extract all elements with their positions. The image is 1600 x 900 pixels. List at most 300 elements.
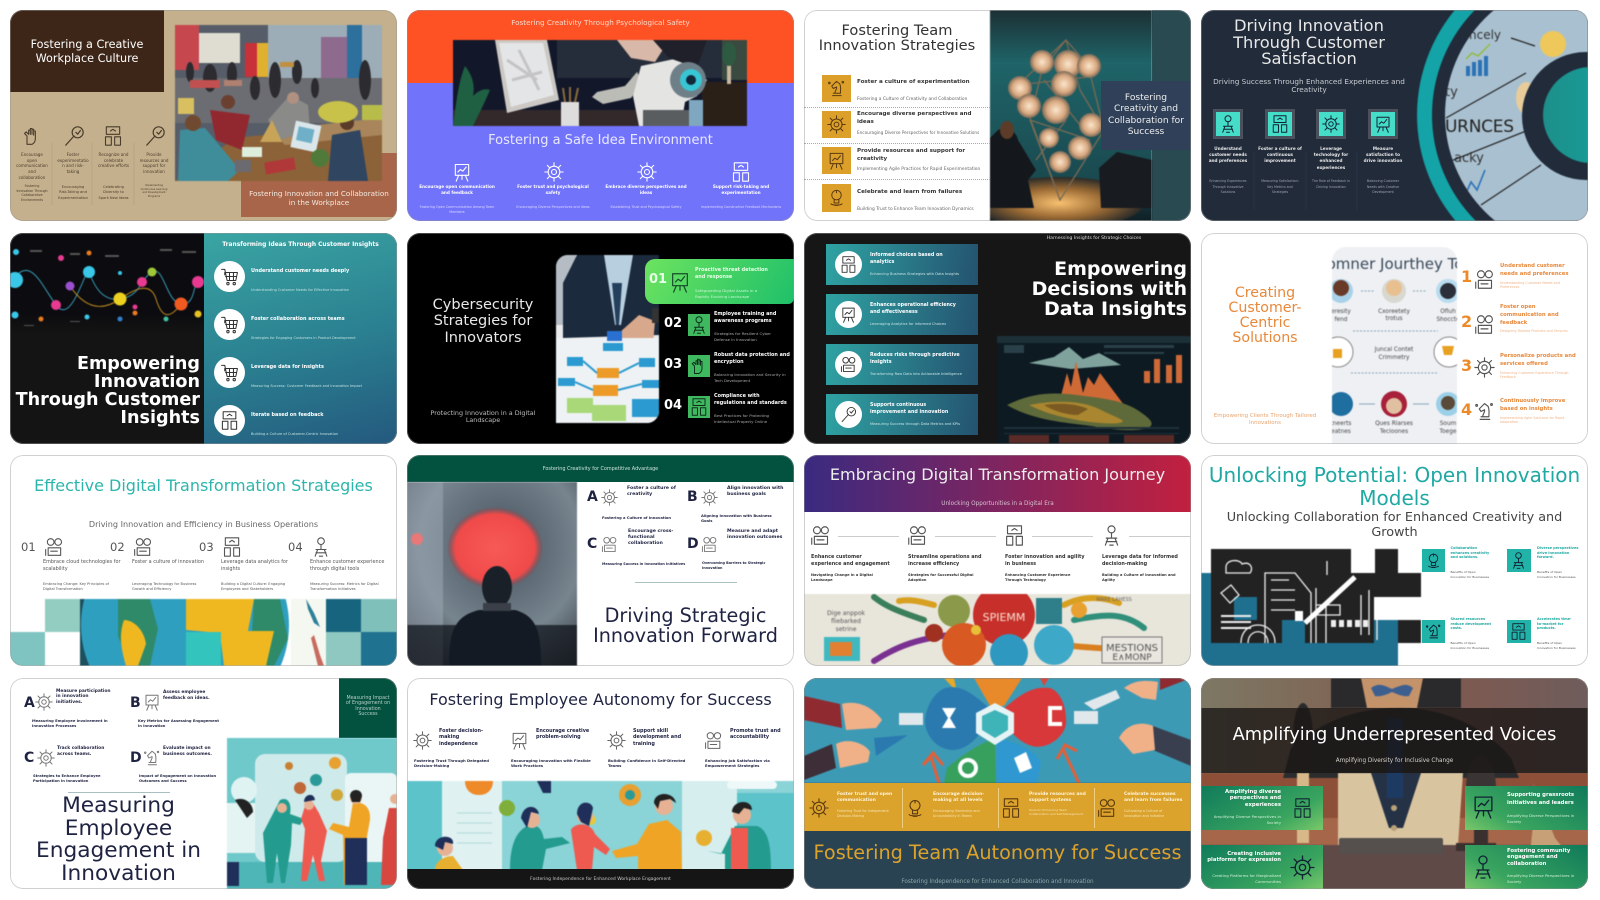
step: measure satisfaction (1364, 109, 1402, 194)
photo: strategy flowchart on table (555, 254, 660, 424)
subtitle: Driving Success Through Enhanced Experiences and (1213, 76, 1405, 86)
item: resources: Tools for Enhancing Team (1029, 808, 1067, 812)
illustration: hands around petals (804, 678, 1191, 782)
card: operational efficiency: Enhances operational efficiency (870, 302, 956, 308)
heading: Measuring (62, 793, 175, 818)
footer band: Fostering Independence for Enhanced Workplace Engagement (530, 876, 671, 882)
column: recognize efforts: Spark New Ideas (98, 196, 129, 200)
row: resources (804, 143, 990, 180)
heading (433, 296, 533, 346)
item B: Assess employee (163, 690, 205, 694)
item B: Aligning Innovation with Business (701, 514, 772, 518)
image: 3D data landscape (996, 336, 1191, 444)
column: foster experimentation: taking (67, 169, 79, 174)
side band (1152, 10, 1191, 221)
item: resources: Provide resources and (1029, 792, 1086, 796)
item C: Strategies to Enhance Employee (33, 774, 101, 778)
step 3 (1461, 353, 1576, 379)
item: risk taking: experimentation (721, 190, 761, 195)
step 04: Transformation Initiatives (310, 587, 356, 591)
photo: busy creative office (174, 24, 382, 182)
card: reduces risks: Transforming Raw Data into Actionable Intelligence (870, 372, 962, 376)
step 4: Adaptation (1500, 420, 1518, 424)
column: encourage communication: Collaborative (21, 193, 43, 197)
item: decision-making: Encouraging Ownership and (933, 808, 980, 812)
title box (10, 10, 164, 92)
step: informed decisions (1101, 525, 1191, 587)
item: open communication: and feedback (441, 190, 473, 195)
row: diverse perspectives: ideas (857, 119, 874, 125)
step: measure satisfaction: Balancing Customer (1367, 179, 1399, 183)
item 01 green highlight (645, 258, 794, 304)
item D (130, 746, 230, 788)
panel: Driving Innovation Through Customer Satisfaction (1201, 10, 1588, 221)
footer band (407, 868, 794, 888)
subtitle: Amplifying Diversity for Inclusive Change (1336, 758, 1453, 764)
insight: leverage data (214, 357, 362, 388)
step: customer experience: Navigating Change in a Digital (811, 573, 873, 577)
item B: Align innovation with (727, 486, 783, 491)
item B: in Innovation (138, 724, 165, 728)
item: diverse perspectives: Benefits of Open (1537, 570, 1562, 574)
step 01: Embrace cloud technologies for (43, 559, 120, 565)
item A: Fostering a Culture of Innovation (602, 516, 671, 520)
step 2 (1461, 304, 1568, 334)
item: skill development: training (633, 741, 655, 747)
heading: Cybersecurity (433, 296, 533, 312)
step 02: Foster a culture of innovation (132, 559, 204, 565)
image: customer journey diagram: Crimmetry (1378, 354, 1410, 360)
step 1: Understand customer (1500, 263, 1565, 269)
item: creativity: enhances creativity (1450, 551, 1489, 555)
green label box (339, 678, 397, 738)
step: technology: technology for (1314, 152, 1348, 157)
item: open communication: Members (449, 210, 465, 214)
column: provide resources: Programs (148, 195, 160, 198)
item D: D (130, 750, 142, 766)
item 03: encryption (714, 358, 744, 364)
item B (687, 486, 792, 524)
item: celebrate: Cultivating a Culture of (1124, 808, 1162, 812)
item 02: Defense in Innovation (714, 337, 757, 342)
step 04: Enhance customer experience (310, 559, 384, 565)
step 04 (288, 537, 393, 597)
subtitle: Innovations (1249, 420, 1281, 426)
heading: Innovation Forward (593, 624, 778, 647)
step: continuous improvement: improvement (1264, 158, 1296, 163)
item C: Track collaboration (57, 746, 104, 750)
heading: Innovation Strategies (819, 37, 975, 54)
heading: Employee (65, 816, 172, 841)
column: recognize efforts: creative efforts (98, 163, 129, 168)
step 4: Continuously improve (1500, 398, 1565, 404)
card: grassroots: Amplifying Diverse Perspectives in (1507, 812, 1574, 818)
card: grassroots: Supporting grassroots (1507, 792, 1574, 798)
item C: C (587, 536, 597, 552)
header band (407, 455, 794, 482)
step: innovation and agility: Foster innovation and agility (1005, 554, 1085, 560)
column: provide resources: Implementing (145, 184, 163, 187)
insight: collaboration (214, 309, 356, 340)
step: measure satisfaction: Needs with Creative (1367, 184, 1399, 188)
item D (687, 533, 792, 571)
heading: Engagement in (36, 838, 201, 863)
card: community engagement (1465, 844, 1588, 888)
orange header band (407, 10, 794, 83)
panel: Fostering a Creative Workplace Culture (10, 10, 397, 221)
heading: Solutions (1232, 330, 1298, 346)
item C: Participation in Innovation (33, 779, 88, 783)
step: understand needs: Solutions (1221, 190, 1235, 194)
circular photo with teal ring: ty (1445, 85, 1458, 100)
panel: Cybersecurity Strategies for Innovators (407, 232, 794, 444)
main heading: Fostering a Safe Idea Environment (488, 133, 713, 148)
item B: feedback on ideas. (163, 696, 210, 701)
divider (68, 792, 170, 793)
card: inclusive platforms (1201, 844, 1323, 888)
step 04: 04 (288, 540, 303, 554)
step 3: 3 (1461, 356, 1472, 374)
item: decision-making: independence (439, 741, 478, 747)
row: diverse perspectives: Encourage diverse perspectives and (857, 111, 971, 117)
column: foster experimentation: Encouraging (62, 185, 84, 189)
step 3: Feedback (1500, 375, 1516, 379)
item: celebrate: Innovation and Initiative (1124, 814, 1164, 818)
item: creativity (1422, 549, 1502, 581)
subtitle: Unlocking Collaboration for Enhanced Creativity and (1227, 510, 1562, 524)
heading: Empowering (77, 354, 200, 374)
card: diverse perspectives: Amplifying Diverse Perspectives in (1214, 814, 1281, 818)
item: celebrate: Celebrate successes (1124, 792, 1176, 796)
item: accountability: Empowerment Strategies (705, 763, 759, 768)
insight: iterate (214, 405, 338, 436)
item B: B (687, 489, 698, 505)
item: diverse perspectives: Establishing Trust and Psychological Safety (610, 205, 682, 209)
item 02: 02 (664, 316, 682, 330)
item: decision-making: making (439, 734, 459, 740)
card: reduces risks: Reduces risks through predictive (870, 352, 960, 358)
item: diverse perspectives (1507, 549, 1588, 581)
circular photo with teal ring: acky (1454, 151, 1484, 166)
right insight panel (204, 232, 397, 444)
item: time to market: Benefits of Open (1537, 641, 1562, 645)
column: encourage communication: open (27, 158, 37, 163)
item 02: Employee training and (714, 310, 776, 316)
step: measure satisfaction: satisfaction to (1366, 152, 1400, 157)
insight: collaboration: Foster collaboration across teams (251, 316, 345, 322)
item 04: regulations and standards (714, 400, 787, 406)
column: recognize efforts: celebrate (104, 158, 123, 163)
column: provide resources (140, 126, 168, 198)
panel: Measuring Employee Engagement in Innovation (10, 678, 397, 888)
label box: Fostering (1125, 93, 1167, 103)
network illustration (10, 233, 204, 326)
row: diverse perspectives: Encouraging Diverse Perspectives for Innovative Solutions (857, 130, 979, 135)
card: operational efficiency: Leveraging Analytics for Informed Choices (870, 322, 946, 326)
row: failures: Building Trust to Enhance Team Innovation Dynamics (857, 207, 974, 212)
item: resources: Collaboration and Self-Management (1029, 812, 1083, 816)
panel: Unlocking Potential: Open Innovation Models: Collaboration (1450, 546, 1477, 550)
heading: Customer- (1228, 300, 1302, 316)
panel: Creating Customer-Centric Solutions (1201, 232, 1588, 444)
column: foster experimentation: experimentatio (57, 158, 89, 163)
row: resources: creativity (857, 156, 887, 162)
item 04 (664, 392, 787, 424)
item: creativity: Benefits of Open (1450, 570, 1476, 574)
panel: Driving Strategic Innovation Forward: Encourage cross- (628, 529, 673, 534)
item: diverse perspectives: forward. (1537, 555, 1554, 559)
card: inclusive platforms: platforms for expression (1207, 857, 1281, 863)
step: technology: Driving Innovation (1316, 184, 1346, 188)
panel: Fostering Team Autonomy for Success (804, 678, 1191, 888)
item: diverse perspectives: ideas (640, 190, 652, 195)
step 3: services offered (1500, 361, 1548, 367)
step 3: Enhancing Customer Experience Through (1500, 371, 1569, 375)
card: informed choices: Enhancing Business Strategies with Data Insights (870, 272, 959, 276)
item: diverse perspectives (605, 162, 687, 209)
image: customer journey diagram: Cxoreetety (1378, 308, 1410, 314)
step: technology: enhanced (1320, 158, 1342, 163)
step: informed decisions: Leverage data for informed (1102, 554, 1178, 560)
header band: Fostering Creativity for Competitive Advantage (543, 466, 658, 472)
panel: Unlocking Potential: Open Innovation Models (1201, 455, 1588, 666)
item 03 (664, 352, 790, 383)
subtitle (431, 408, 535, 424)
image: colourful mind map: WAKE LAHESS (1096, 597, 1132, 603)
step 2: 2 (1461, 312, 1472, 330)
item D: Evaluate impact on (163, 746, 211, 750)
heading: Innovation (94, 372, 200, 392)
subtitle: Growth (1371, 524, 1418, 540)
card: informed choices: analytics (870, 260, 894, 264)
item: trust and safety: Foster trust and psychological (517, 184, 589, 189)
divider (635, 582, 737, 583)
heading: Strategies for (434, 313, 532, 329)
step 3: Personalize products and (1500, 353, 1576, 359)
image: customer journey diagram: Toege (1439, 428, 1457, 434)
item: accountability: Promote trust and (730, 728, 781, 734)
step: streamline operations: Adoption (908, 578, 926, 582)
title box: Fostering a Creative (31, 38, 143, 51)
image: colourful mind map: MESTIONS (1106, 643, 1158, 654)
insight: leverage data: Leverage data for insights (251, 364, 324, 370)
item: trust: Decision-Making (837, 814, 864, 818)
item A: Innovation Processes (32, 724, 76, 728)
card: grassroots: initiatives and leaders (1507, 800, 1574, 806)
subtitle (1213, 76, 1405, 94)
photo: robot at monitor (452, 39, 748, 127)
item: trust and safety (516, 162, 590, 209)
column: recognize efforts: Celebrating (103, 185, 124, 189)
item B: Key Metrics for Assessing Engagement (138, 719, 219, 723)
item: shared resources: Benefits of Open (1450, 641, 1476, 645)
item A (587, 486, 687, 524)
subtitle (1201, 510, 1588, 540)
item: decision-making: Encourage decision- (933, 792, 984, 796)
column: foster experimentation: Risk-Taking and (59, 190, 87, 194)
item: accountability: accountability (730, 734, 769, 740)
item: time to market: products. (1537, 626, 1556, 630)
step 02: 02 (110, 540, 125, 554)
step: innovation and agility (1004, 525, 1099, 587)
image: textured globe mosaic (10, 599, 397, 666)
heading: Models (1359, 486, 1430, 510)
card: community engagement: Society (1507, 878, 1521, 884)
image: colourful mind map: Dige anppok (827, 610, 865, 617)
item 02: awareness programs (714, 318, 772, 324)
step: customer experience: experience and engagement (811, 561, 890, 567)
subtitle (1214, 412, 1316, 426)
column: provide resources: support for (143, 163, 165, 168)
circular photo with teal ring (1416, 10, 1588, 221)
step 03: 03 (199, 540, 214, 554)
column: recognize efforts (98, 126, 129, 200)
step: continuous improvement: Foster a culture of (1258, 146, 1302, 151)
step 4: Implementing Agile Solutions for Rapid (1500, 416, 1564, 420)
item: trust: Foster trust and open (837, 792, 892, 796)
green label box: Innovation (355, 707, 381, 712)
heading: Centric (1240, 314, 1290, 330)
card: continuous improvement: Supports continuous (870, 402, 926, 408)
subtitle: Landscape (466, 416, 500, 424)
item: decision-making: Foster decision- (439, 728, 483, 734)
item: trust and safety: Encouraging Diverse Perspectives and Ideas (516, 205, 590, 209)
step 1 (1461, 263, 1568, 289)
column: foster experimentation (57, 126, 89, 200)
card: reduces risks: insights (870, 360, 892, 364)
step: technology: The Role of Feedback in (1312, 179, 1350, 183)
green label box: of Engagement on (346, 701, 390, 706)
step: understand needs: customer needs (1209, 152, 1247, 157)
item 03: Tech Development (714, 378, 750, 383)
item D: Outcomes and Success (139, 779, 187, 783)
item: decision-making: making at all levels (933, 798, 982, 803)
item C (24, 746, 124, 788)
item: shared resources: costs. (1450, 626, 1462, 630)
circular photo with teal ring: ncely (1469, 28, 1501, 42)
image: customer journey diagram: trotus (1385, 316, 1403, 322)
heading (577, 606, 794, 646)
column: encourage communication (16, 128, 48, 202)
item: decision-making (905, 788, 999, 828)
gradient header with title: Embracing Digital Transformation Journey (830, 465, 1165, 484)
card: inclusive platforms: Communities (1255, 878, 1281, 884)
item C: C (24, 750, 34, 766)
dark title band (1201, 708, 1588, 772)
item 03: 03 (664, 356, 682, 372)
item C: functional (628, 535, 655, 540)
item 02 (664, 310, 776, 342)
subtitle: Driving Innovation and Efficiency in Business Operations (89, 519, 318, 529)
step: innovation and agility: Through Technology (1005, 578, 1046, 582)
item: resources: support systems (1029, 798, 1071, 803)
heading (16, 354, 200, 428)
column: foster experimentation: Foster (67, 152, 79, 157)
subtitle: Empowering Clients Through Tailored (1214, 412, 1316, 418)
step: continuous improvement: Strategies (1272, 190, 1288, 194)
step 04: through digital tools (310, 566, 359, 572)
insight: iterate: Building a Culture of Customer-Centric Innovation (251, 432, 338, 436)
column: encourage communication: communication (16, 163, 48, 168)
illustration: colleagues shaking hands (227, 738, 397, 888)
panel: Unlocking Potential: Open Innovation Models: Shared resources (1450, 617, 1485, 621)
step: understand needs (1208, 109, 1248, 194)
column: provide resources: innovation (143, 169, 165, 174)
item: shared resources: Innovation for Businesses (1450, 646, 1489, 650)
step 01: Digital Transformation (43, 587, 83, 591)
step 4: 4 (1461, 400, 1472, 418)
item D: Innovation (702, 566, 722, 570)
item B (130, 690, 230, 732)
image: customer journey diagram: Juncal Contet (1374, 346, 1414, 352)
step: innovation and agility: in business (1005, 561, 1036, 567)
heading: Fostering Team Autonomy for Success (814, 840, 1182, 864)
item 04: Intellectual Property Online (714, 419, 767, 424)
item: risk taking: Support risk-taking and (713, 184, 769, 189)
circular photo with teal ring: URNCES (1445, 117, 1514, 137)
step: informed decisions: Building a Culture of Innovation and (1102, 573, 1176, 577)
panel: Creating Customer-Centric Solutions: Foster open (1500, 304, 1536, 310)
card: operational efficiency (826, 294, 978, 334)
column: encourage communication: and (28, 169, 36, 174)
gold item band (804, 782, 1191, 830)
item: skill development: development and (633, 734, 681, 740)
panel: Embracing Digital Transformation Journey (804, 455, 1191, 666)
item: trust: Fostering Trust for Independent (837, 808, 889, 812)
card: diverse perspectives: Society (1267, 820, 1281, 824)
item: decision-making: Accountability in Teams (933, 814, 972, 818)
row: experimentation: Fostering a Culture of Creativity and Collaboration (857, 97, 967, 102)
card: inclusive platforms: Creating inclusive (1227, 850, 1281, 856)
card: diverse perspectives: perspectives and (1230, 795, 1281, 801)
card: diverse perspectives: experiences (1245, 802, 1281, 808)
photo: man facing red glowing sphere (407, 482, 577, 666)
column: encourage communication: Encourage (21, 152, 43, 157)
panel: Fostering Team Innovation Strategies (804, 10, 1191, 221)
step: streamline operations: Streamline operations and (908, 554, 981, 560)
step: measure satisfaction: Development (1372, 190, 1394, 194)
item: decision-making: Fostering Trust Through Delegated (414, 758, 489, 762)
item 01 green highlight: 01 (649, 272, 667, 286)
card: continuous improvement: improvement and innovation (870, 410, 948, 414)
row: failures: Celebrate and learn from failures (857, 189, 962, 195)
step: understand needs: Understand (1214, 146, 1242, 151)
item A: Foster a culture of (627, 486, 676, 491)
step: technology: Leverage (1320, 146, 1342, 151)
step 04: Measuring Success: Metrics for Digital (310, 582, 379, 586)
row: diverse perspectives (804, 107, 990, 144)
heading: Through Customer (1233, 33, 1385, 52)
heading: Innovators (444, 330, 522, 346)
heading: Through Customer (16, 390, 200, 410)
green label box: Measuring Impact (346, 696, 390, 700)
item 03: Balancing Innovation and Security in (714, 372, 786, 376)
item: open communication (419, 164, 495, 214)
item 04: Compliance with (714, 392, 760, 398)
step: customer experience: Landscape (811, 578, 833, 582)
subtitle: Creativity (1291, 85, 1327, 94)
item A: creativity (627, 492, 652, 497)
top subtitle: Harnessing Insights for Strategic Choices (1047, 236, 1141, 240)
item: risk taking: Implementing Constructive Feedback Mechanisms (701, 205, 781, 209)
item 01 green highlight: Safeguarding Digital Assets in a (695, 288, 757, 292)
item D: D (687, 536, 699, 552)
panel: Empowering Innovation Through Customer Insights (10, 232, 397, 444)
item C (587, 533, 687, 571)
subtitle: Protecting Innovation in a Digital (431, 408, 535, 416)
item: celebrate (1097, 788, 1187, 828)
label box: Success (1128, 127, 1164, 137)
